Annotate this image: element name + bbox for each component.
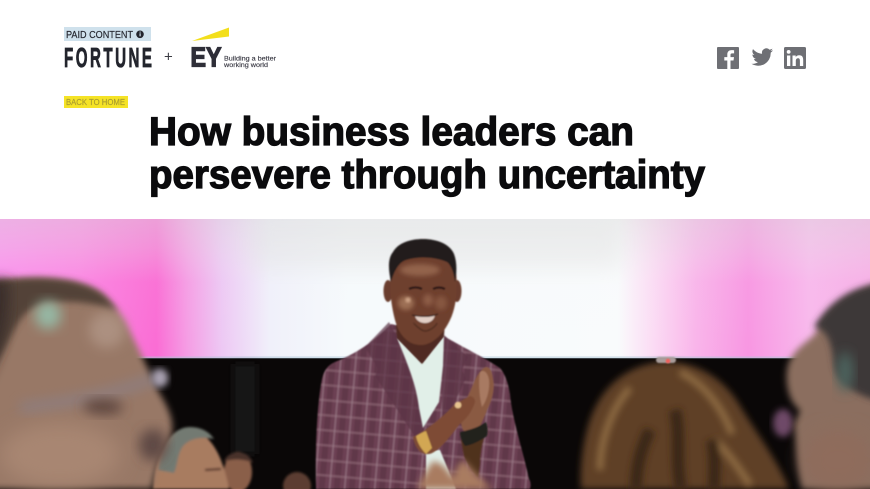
title: How business leaders can [149,110,634,154]
title: persevere through uncertainty [149,153,705,197]
man: jacket [316,322,531,489]
logo: EY: EY [190,42,222,72]
title [149,110,705,197]
man: neck and head [384,239,462,364]
man: shirt [397,336,456,489]
logo: Fortune: FORTUNE [64,42,152,73]
near forearm and hand [413,396,475,454]
icon: linkedin [784,47,806,69]
beaded bracelet [460,422,488,446]
far hand [460,367,494,432]
logo: EY [190,28,277,72]
icon: facebook [717,47,739,69]
ring [455,402,461,408]
background: lit pink and white screen [0,219,870,359]
background: dark stage [0,356,870,489]
paid content label [64,27,151,41]
blurred foreground head: woman with brown hair [581,357,789,489]
background attendee: older man [153,427,311,489]
plus sign: + [164,48,173,66]
far forearm below bracelet [461,434,485,478]
gold bracelet [416,431,432,454]
photo: man applauding at event [0,219,870,489]
face highlights [398,264,447,310]
jacket lapels [367,322,466,433]
back to home button: BACK TO HOME [66,98,125,107]
blurred foreground hands [417,460,493,489]
blurred foreground head: left [0,278,172,489]
logo: EY: Building a better [224,56,277,62]
paid content label: PAID CONTENT [66,30,134,41]
blurred foreground head: right [773,283,870,489]
icon: twitter [752,48,773,66]
logo: EY: working world [223,62,268,69]
man: clapping hands and jewellery [413,367,494,478]
